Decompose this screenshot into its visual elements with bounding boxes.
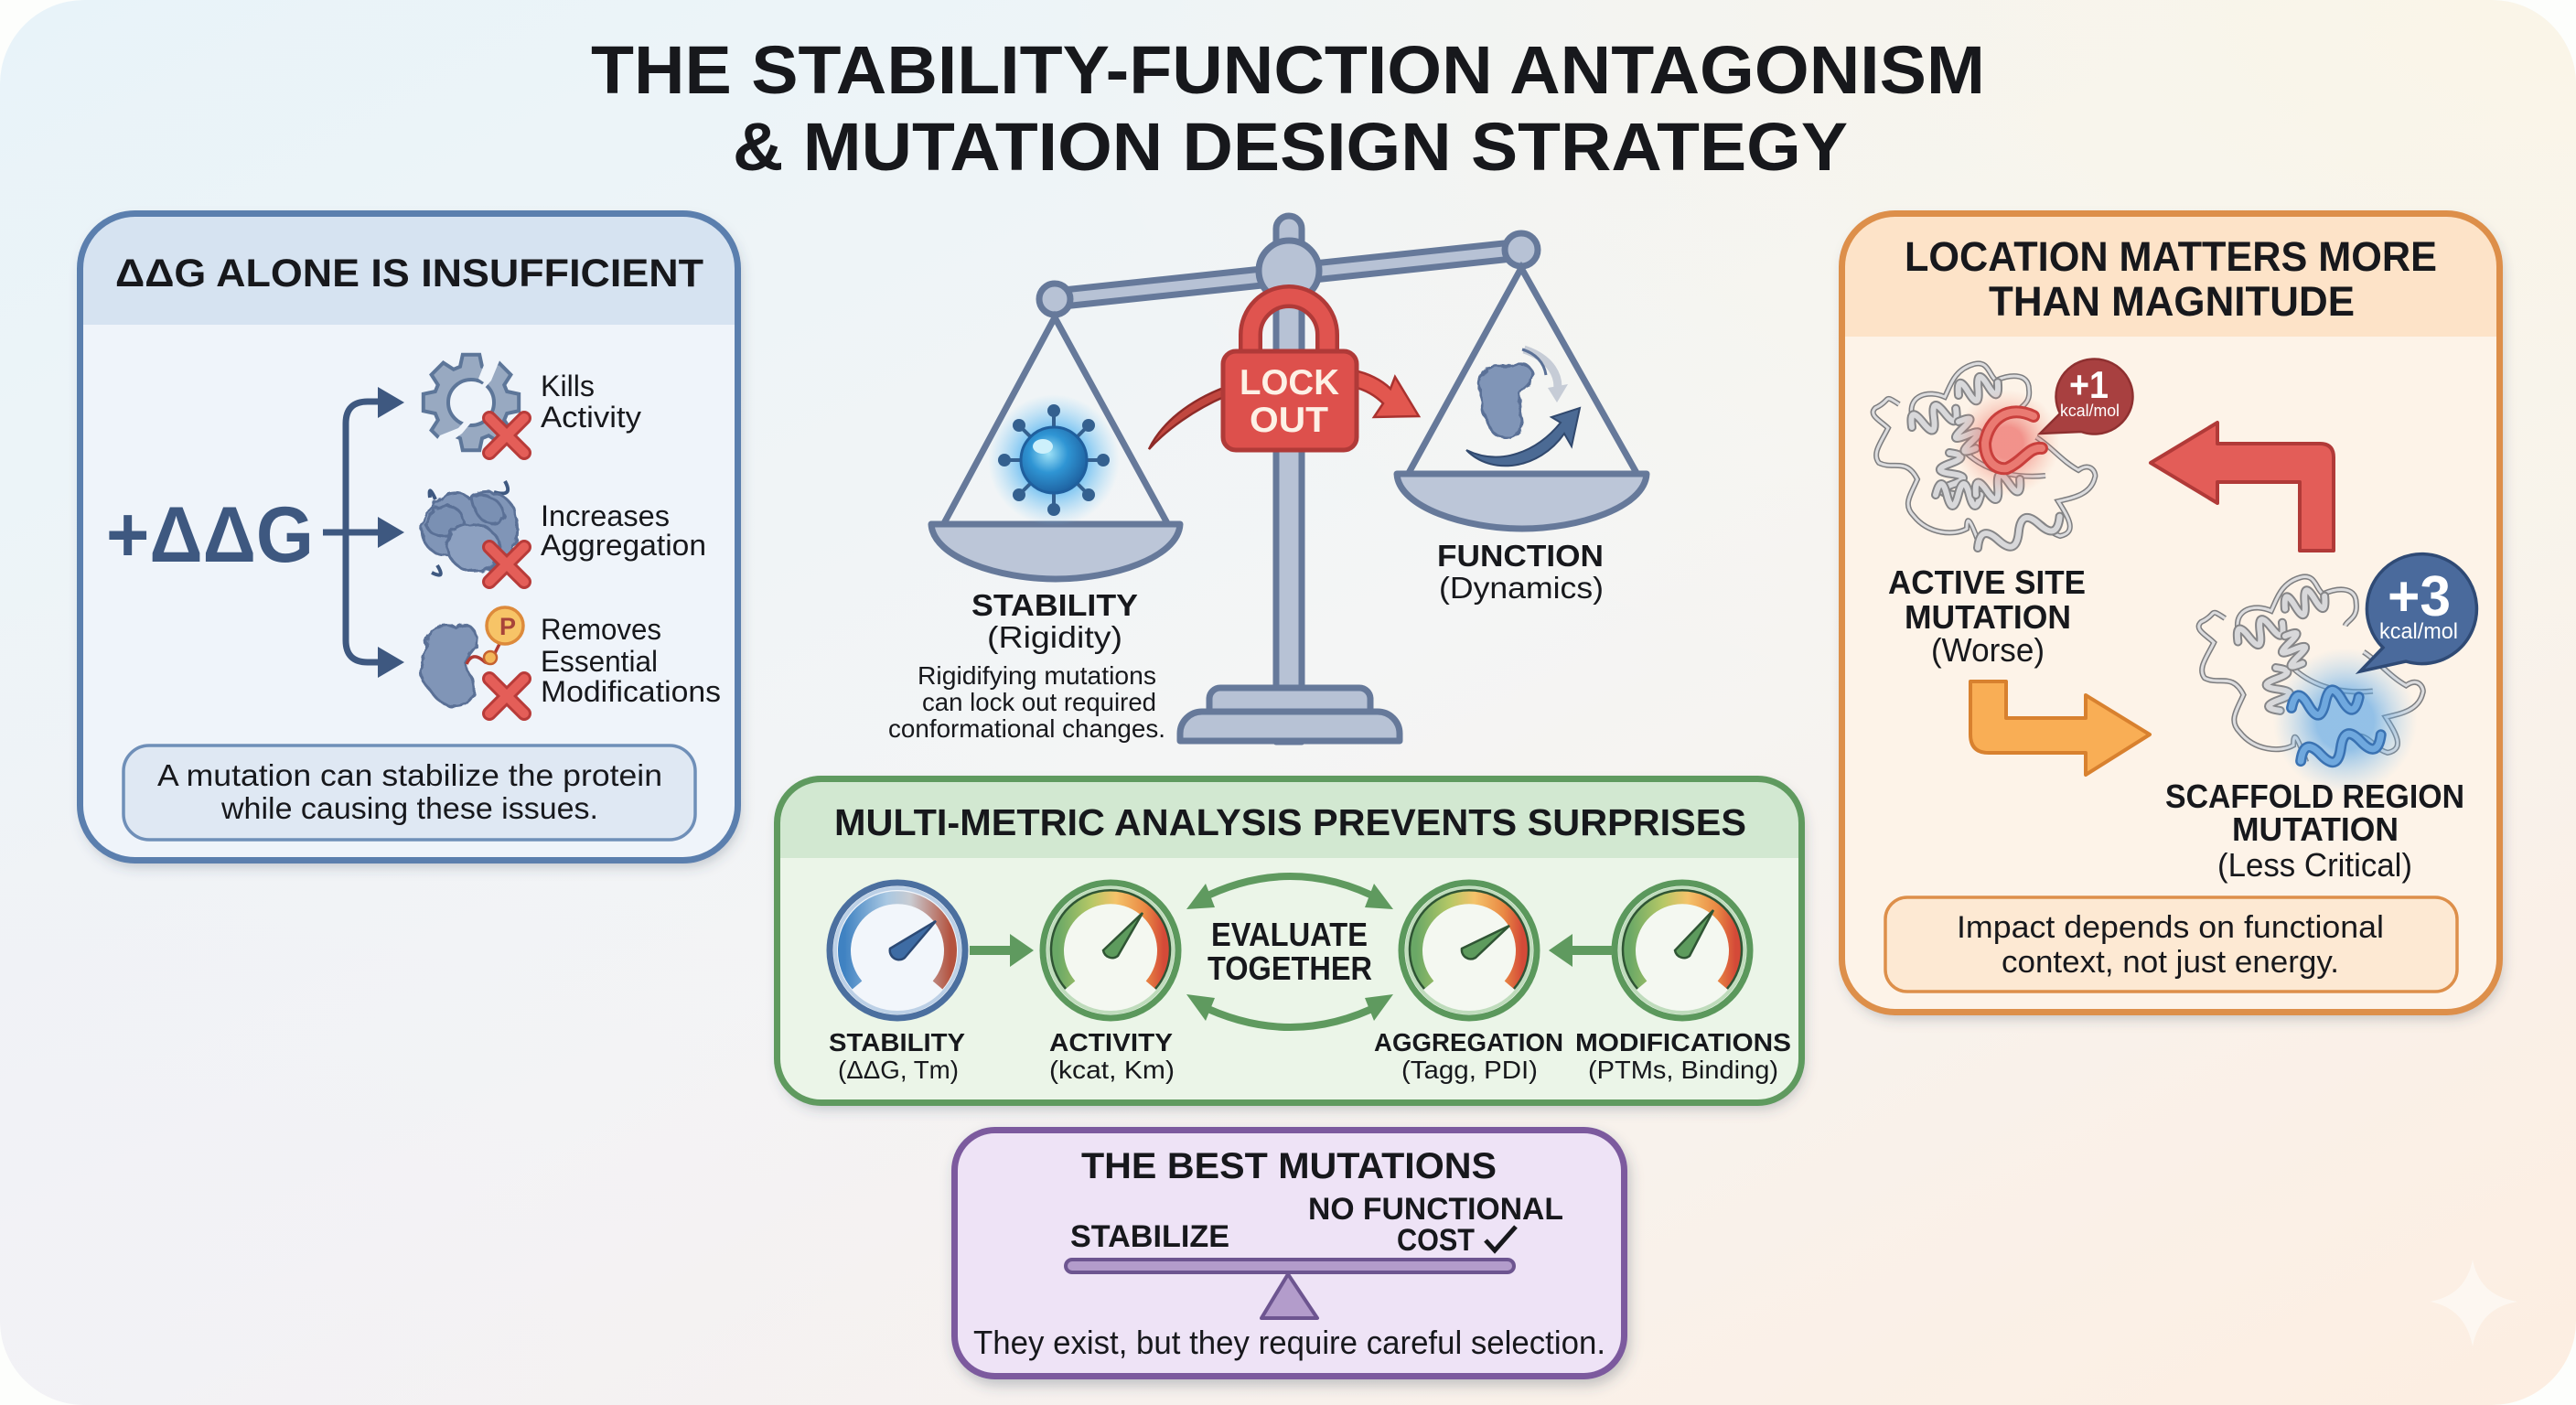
metric labels: AGGREGATION bbox=[1374, 1028, 1563, 1056]
panel: delta delta G alone is insufficient bbox=[80, 214, 737, 860]
right pan: function bbox=[1397, 268, 1647, 529]
scale beam bbox=[1039, 233, 1538, 315]
stability label: can lock out required bbox=[922, 688, 1156, 716]
active site protein bbox=[1873, 363, 2095, 558]
active site label: MUTATION bbox=[1905, 598, 2071, 636]
panel heading: ΔΔG ALONE IS INSUFFICIENT bbox=[115, 252, 703, 295]
arrow: stability to activity bbox=[970, 934, 1034, 967]
stability label: Rigidifying mutations bbox=[918, 661, 1156, 690]
metric labels: (ΔΔG, Tm) bbox=[838, 1056, 959, 1084]
callout bbox=[1885, 897, 2457, 992]
metric labels: MODIFICATIONS bbox=[1575, 1028, 1791, 1056]
curved lock-out arrow bbox=[1149, 370, 1419, 449]
arrow: modifications to aggregation bbox=[1549, 934, 1613, 967]
panel: location matters more than magnitude bbox=[1842, 214, 2499, 1012]
panel heading bbox=[1905, 233, 2437, 325]
no functional cost label: NO FUNCTIONAL bbox=[1308, 1192, 1563, 1227]
icon: glowing rigid protein bbox=[988, 394, 1120, 526]
scaffold region label: (Less Critical) bbox=[2217, 846, 2412, 884]
callout: context, not just energy. bbox=[2002, 945, 2339, 980]
metric labels: (PTMs, Binding) bbox=[1588, 1056, 1778, 1084]
callout: A mutation can stabilize the protein bbox=[157, 758, 662, 792]
icon: protein losing modification: P bbox=[499, 613, 516, 640]
effect labels: Aggregation bbox=[541, 529, 706, 562]
effect labels: Activity bbox=[541, 401, 641, 434]
effect labels: Modifications bbox=[541, 675, 721, 708]
icon: broken gear bbox=[424, 351, 519, 450]
no functional cost label bbox=[1308, 1192, 1563, 1258]
no functional cost label: COST bbox=[1397, 1223, 1475, 1258]
icon: red padlock bbox=[1223, 296, 1357, 450]
effect labels bbox=[541, 370, 721, 708]
metric labels: (Tagg, PDI) bbox=[1401, 1056, 1538, 1084]
orange arrow to scaffold region bbox=[1970, 681, 2150, 775]
title: THE STABILITY-FUNCTION ANTAGONISM bbox=[591, 32, 1985, 108]
scaffold region label: MUTATION bbox=[2232, 810, 2399, 848]
scaffold region label: SCAFFOLD REGION bbox=[2165, 778, 2464, 815]
effect labels: Essential bbox=[541, 645, 658, 678]
panel heading: MULTI-METRIC ANALYSIS PREVENTS SURPRISES bbox=[834, 801, 1746, 843]
stabilize label: STABILIZE bbox=[1070, 1219, 1229, 1254]
big plus delta delta G: +ΔΔG bbox=[106, 491, 314, 579]
left pan: stability bbox=[931, 317, 1180, 579]
panel: multi-metric analysis bbox=[778, 779, 1802, 1103]
stability label: conformational changes. bbox=[888, 714, 1165, 743]
branching arrows bbox=[323, 387, 404, 678]
stability label: STABILITY bbox=[971, 588, 1138, 622]
gauge: stability bbox=[830, 883, 965, 1018]
active site label bbox=[1888, 563, 2086, 669]
active site label: ACTIVE SITE bbox=[1888, 563, 2086, 601]
+1 kcal/mol bubble: kcal/mol bbox=[2060, 402, 2120, 420]
+3 kcal/mol bubble: +3 bbox=[2388, 565, 2451, 628]
active site label: (Worse) bbox=[1931, 631, 2045, 669]
icon: dynamic protein with motion arrows bbox=[1466, 349, 1580, 466]
metric labels: ACTIVITY bbox=[1049, 1028, 1173, 1056]
title bbox=[591, 32, 1985, 185]
function label: (Dynamics) bbox=[1439, 571, 1604, 605]
evaluate together text: TOGETHER bbox=[1208, 949, 1372, 987]
+3 kcal/mol bubble: kcal/mol bbox=[2379, 619, 2458, 644]
effect labels: Removes bbox=[541, 613, 661, 646]
icon: red padlock: LOCK bbox=[1240, 363, 1339, 402]
icon: red x on aggregate bbox=[489, 547, 524, 582]
gauge: aggregation bbox=[1401, 883, 1537, 1018]
evaluate together text: EVALUATE bbox=[1211, 916, 1368, 953]
icon: red padlock: OUT bbox=[1250, 401, 1328, 440]
evaluate together text bbox=[1208, 916, 1372, 987]
metric labels: STABILITY bbox=[829, 1028, 965, 1056]
+1 kcal/mol bubble: +1 bbox=[2069, 363, 2109, 406]
icon: red x on modification bbox=[489, 679, 524, 713]
gauge: modifications bbox=[1615, 883, 1750, 1018]
panel heading: LOCATION MATTERS MORE bbox=[1905, 233, 2437, 280]
callout: while causing these issues. bbox=[220, 791, 598, 825]
sparkle watermark bbox=[2430, 1260, 2517, 1346]
caption: They exist, but they require careful selection. bbox=[973, 1324, 1605, 1361]
balanced beam bbox=[1066, 1260, 1514, 1318]
effect labels: Kills bbox=[541, 370, 595, 402]
scaffold region label bbox=[2165, 778, 2464, 884]
balance scale bbox=[888, 216, 1647, 743]
icon: protein losing modification bbox=[421, 607, 523, 706]
red arrow to active site bbox=[2151, 423, 2334, 551]
icon: red x on gear bbox=[489, 418, 524, 453]
metric labels: (kcat, Km) bbox=[1049, 1056, 1175, 1084]
title: & MUTATION DESIGN STRATEGY bbox=[733, 109, 1848, 185]
+3 kcal/mol bubble bbox=[2360, 554, 2476, 671]
curved double arrows bbox=[1186, 876, 1393, 1027]
function label: FUNCTION bbox=[1437, 539, 1604, 573]
callout bbox=[123, 745, 695, 840]
gauge: activity bbox=[1043, 883, 1178, 1018]
function label bbox=[1437, 539, 1604, 605]
stability label: (Rigidity) bbox=[987, 620, 1122, 654]
callout: Impact depends on functional bbox=[1957, 910, 2384, 945]
+1 kcal/mol bubble bbox=[2040, 359, 2132, 434]
effect labels: Increases bbox=[541, 499, 670, 532]
metric labels bbox=[829, 1028, 1791, 1084]
panel heading: THAN MAGNITUDE bbox=[1989, 278, 2355, 325]
panel heading: THE BEST MUTATIONS bbox=[1081, 1146, 1497, 1186]
scaffold region protein bbox=[2199, 576, 2423, 794]
panel: the best mutations bbox=[955, 1131, 1625, 1376]
stability label bbox=[888, 588, 1165, 743]
scale post and base bbox=[1180, 216, 1400, 742]
icon: protein aggregate bbox=[422, 481, 518, 575]
